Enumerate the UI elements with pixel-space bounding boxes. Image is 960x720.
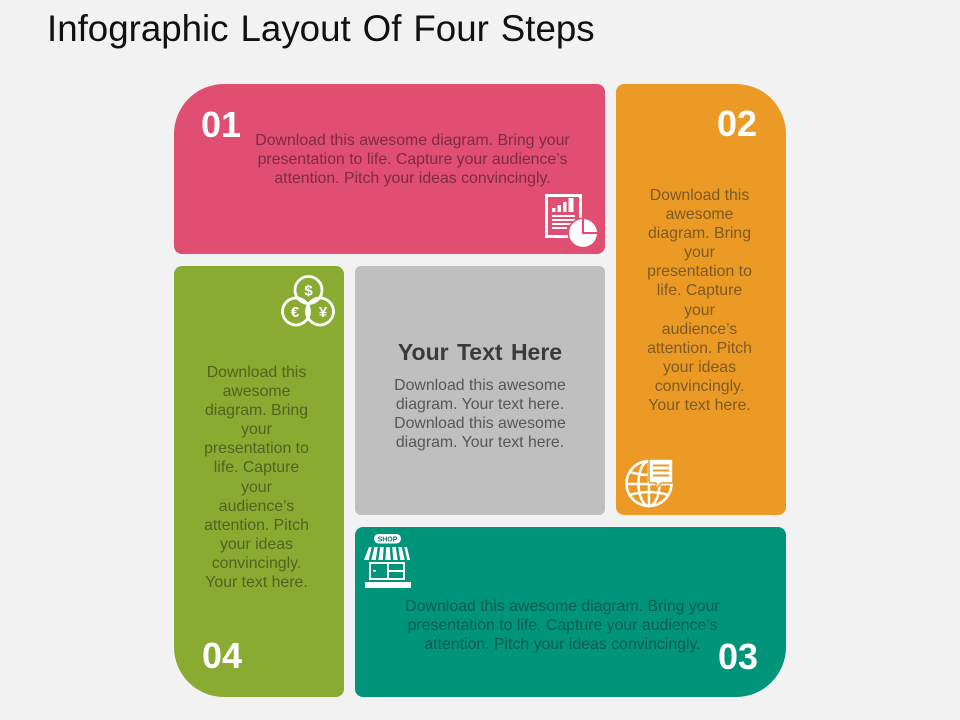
- text block 04: your: [241, 421, 272, 438]
- text block 02: your: [684, 302, 715, 319]
- text block 02: presentation to: [647, 263, 752, 280]
- panel: step 02: [616, 84, 786, 515]
- panel: step 04: [174, 266, 344, 697]
- text block 04: diagram. Bring: [205, 402, 308, 419]
- text block 02: [647, 187, 752, 414]
- text block 02: attention. Pitch: [647, 340, 752, 357]
- icon: three currency circles: [281, 275, 335, 326]
- text block 04: presentation to: [204, 440, 309, 457]
- text block 03: [405, 598, 720, 653]
- text block 02: awesome: [666, 206, 733, 223]
- text block 01: attention. Pitch your ideas convincingly.: [274, 170, 551, 187]
- icon: shop: SHOP: [378, 536, 398, 543]
- panel: center: [355, 266, 605, 515]
- panel: step 03: [355, 527, 786, 697]
- text block 04: attention. Pitch: [204, 517, 309, 534]
- text block 03: presentation to life. Capture your audience’s: [408, 617, 717, 634]
- text block 02: convincingly.: [655, 378, 744, 395]
- text block 04: life. Capture: [214, 459, 299, 476]
- step number 03: 03: [718, 636, 758, 677]
- title: Infographic Layout Of Four Steps: [47, 8, 595, 49]
- text block 02: your ideas: [663, 359, 736, 376]
- icon: globe with speech bubble: [625, 460, 673, 508]
- icon: three currency circles: ¥: [319, 304, 328, 321]
- text block 04: Your text here.: [205, 574, 308, 591]
- text block 02: Download this: [650, 187, 749, 204]
- text block 04: Download this: [207, 364, 306, 381]
- step number 04: 04: [202, 635, 242, 676]
- text block 04: your: [241, 479, 272, 496]
- step number 01: 01: [201, 104, 241, 145]
- text block 02: Your text here.: [648, 397, 751, 414]
- text block 01: presentation to life. Capture your audience’s: [258, 151, 567, 168]
- text block 04: convincingly.: [212, 555, 301, 572]
- center text block: diagram. Your text here.: [396, 396, 564, 413]
- text block 03: attention. Pitch your ideas convincingly.: [424, 636, 701, 653]
- panel: step 01: [174, 84, 605, 254]
- text block 04: your ideas: [220, 536, 293, 553]
- center heading: Your Text Here: [398, 339, 562, 365]
- center text block: Download this awesome: [394, 415, 566, 432]
- text block 02: audience’s: [662, 321, 737, 338]
- center text block: diagram. Your text here.: [396, 434, 564, 451]
- text block 01: Download this awesome diagram. Bring your: [255, 132, 570, 149]
- text block 01: [255, 132, 570, 187]
- text block 02: life. Capture: [657, 282, 742, 299]
- text block 04: [204, 364, 309, 591]
- icon: three currency circles: $: [304, 282, 313, 300]
- center text block: Download this awesome: [394, 377, 566, 394]
- icon: shop: [364, 534, 411, 588]
- icon: three currency circles: €: [291, 304, 300, 321]
- center text block: [394, 377, 566, 451]
- text block 04: awesome: [223, 383, 290, 400]
- text block 02: diagram. Bring: [648, 225, 751, 242]
- text block 02: your: [684, 244, 715, 261]
- text block 03: Download this awesome diagram. Bring your: [405, 598, 720, 615]
- step number 02: 02: [717, 103, 757, 144]
- text block 04: audience’s: [219, 498, 294, 515]
- icon: report with pie chart: [545, 194, 597, 247]
